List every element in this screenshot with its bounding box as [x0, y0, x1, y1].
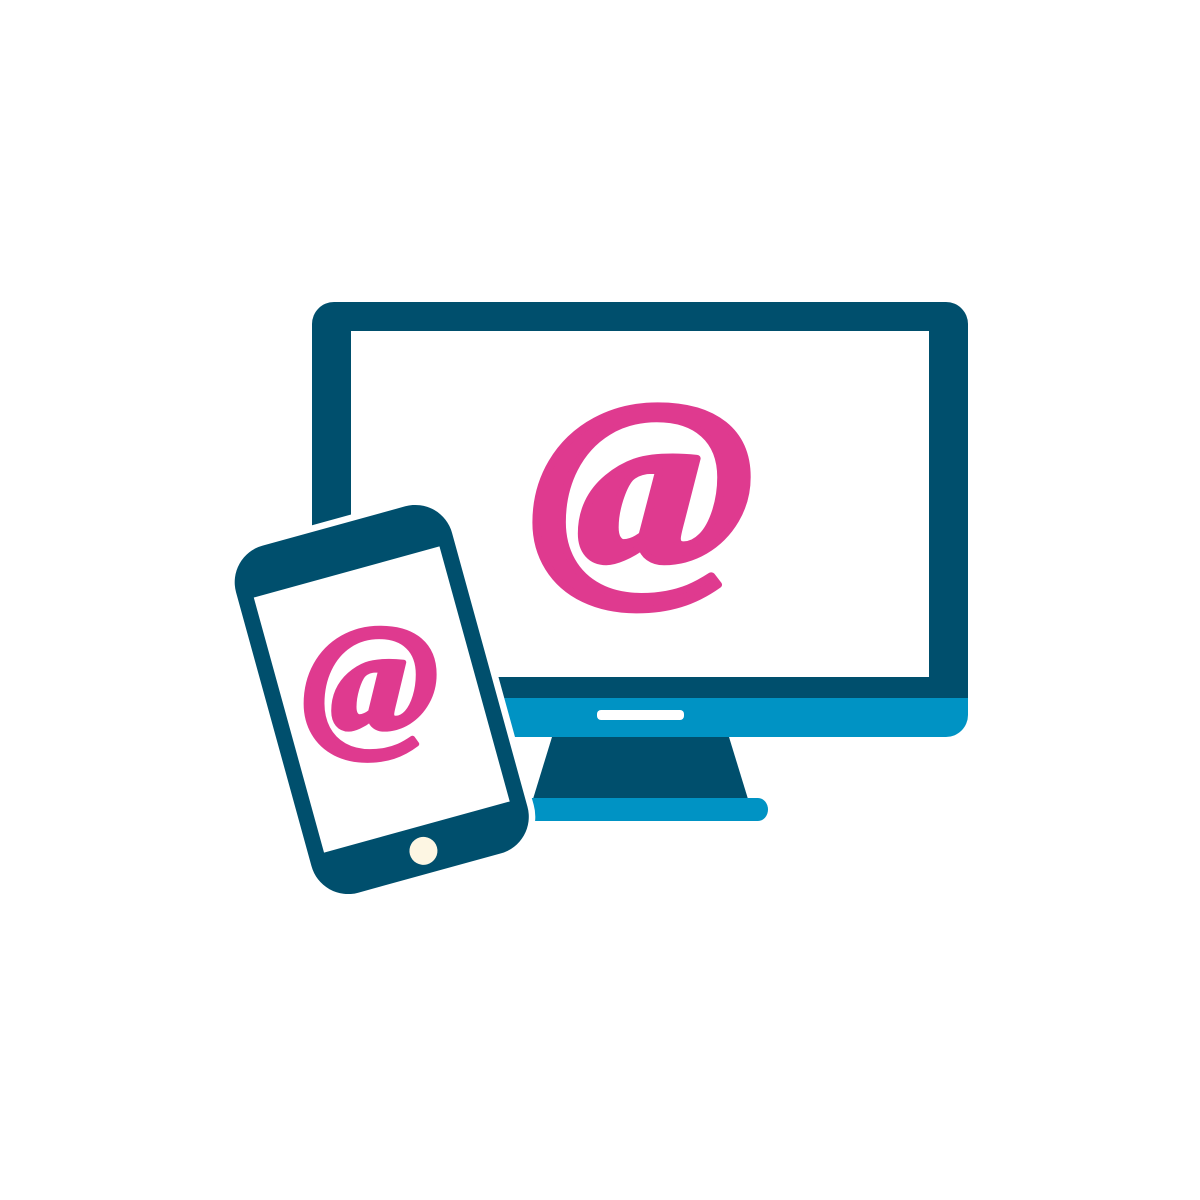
phone screen — [254, 546, 510, 853]
email symbol on phone: @ — [302, 594, 438, 765]
icon: desktop monitor — [312, 302, 968, 821]
monitor chin — [312, 698, 968, 737]
phone home button — [406, 834, 441, 868]
email symbol on monitor: @ — [530, 353, 754, 616]
monitor bezel — [312, 302, 968, 698]
monitor screen — [351, 331, 929, 677]
monitor indicator light — [597, 710, 684, 720]
phone body — [226, 496, 538, 903]
monitor stand — [533, 737, 748, 799]
monitor stand base — [530, 798, 768, 821]
icon: smartphone — [226, 496, 538, 903]
